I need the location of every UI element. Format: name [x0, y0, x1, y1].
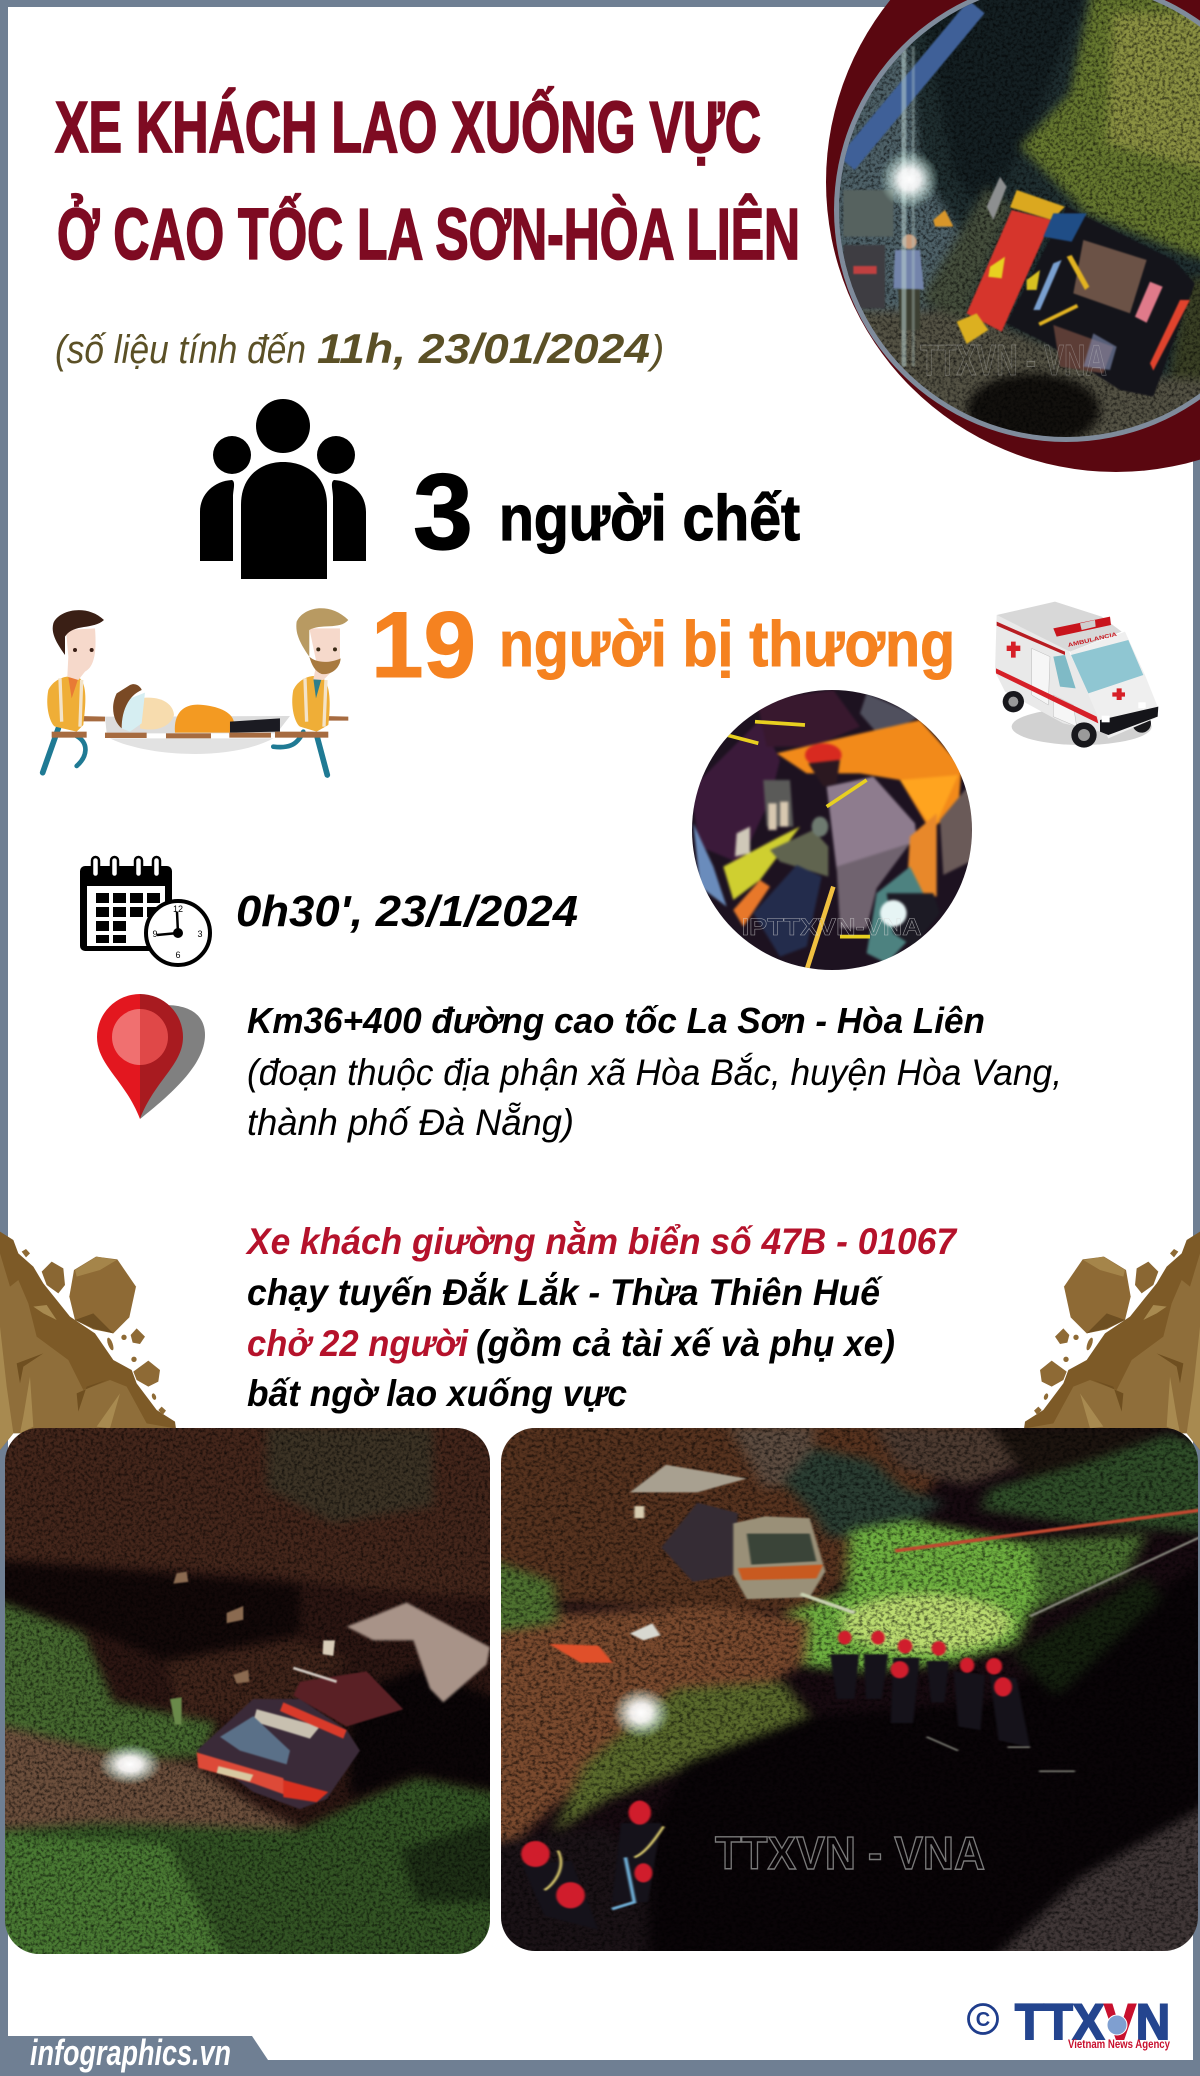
date and time of accident: 0h30', 23/1/2024 — [236, 887, 578, 936]
text: bus description: Xe khách giường nằm biển số 47B - 01067 — [245, 1220, 958, 1262]
stat: 3 deaths: người chết — [499, 482, 800, 554]
icon: falling rocks right — [1023, 1232, 1200, 1450]
text: bus description: (gồm cả tài xế và phụ xe) — [476, 1323, 895, 1364]
icon: calendar with clock: 3 — [197, 929, 203, 939]
title: Ở CAO TỐC LA SƠN-HÒA LIÊN — [57, 193, 800, 275]
photo: rescuers with injured person — [692, 690, 972, 970]
subtitle: data as of date: 11h, 23/01/2024 — [317, 325, 650, 372]
bus wreck — [661, 1503, 738, 1582]
photo: rescue team at ravine — [486, 1413, 1200, 1971]
crane — [847, 7, 977, 163]
text: accident location: thành phố Đà Nẵng) — [247, 1102, 574, 1143]
subtitle: data as of date: ) — [647, 328, 664, 372]
stat: 19 injured — [371, 592, 955, 697]
logo: TTXVN Vietnam News Agency: TTXVN — [1015, 1994, 1170, 2050]
text: accident location — [247, 1000, 1062, 1143]
icon: calendar with clock: 6 — [175, 950, 181, 960]
icon: map pin — [97, 994, 205, 1119]
text: bus description: chạy tuyến Đắk Lắk - Thừa Thiên Huế — [247, 1271, 883, 1313]
firefighters — [522, 1654, 1030, 1930]
stat: 19 injured: người bị thương — [499, 608, 955, 680]
icon: calendar with clock: 9 — [152, 929, 158, 939]
photo: rescue team at ravine: TTXVN - VNA — [715, 1827, 985, 1879]
subtitle: data as of date: (số liệu tính đến — [55, 328, 306, 372]
footer tab: infographics.vn: infographics.vn — [30, 2032, 231, 2073]
text: bus description: bất ngờ lao xuống vực — [247, 1373, 627, 1414]
photo: overturned bus in circular frame: TTXVN - VNA — [920, 336, 1107, 385]
icon: ambulance — [995, 602, 1158, 748]
subtitle: data as of date — [55, 325, 664, 372]
text: bus description — [245, 1220, 958, 1414]
icon: falling rocks left — [0, 1232, 177, 1450]
photo: wrecked bus in ravine — [0, 1413, 507, 1971]
text: accident location: (đoạn thuộc địa phận xã Hòa Bắc, huyện Hòa Vang, — [247, 1052, 1062, 1093]
title: XE KHÁCH LAO XUỐNG VỰC — [55, 86, 761, 168]
icon: ambulance: AMBULANCIA — [1067, 632, 1117, 649]
icon: calendar with clock: 12 — [173, 904, 183, 914]
text: accident location: Km36+400 đường cao tốc La Sơn - Hòa Liên — [247, 1000, 985, 1041]
photo: rescuers with injured person: IPTTXVN-VNA — [742, 914, 922, 941]
text: bus description: chở 22 người — [247, 1323, 469, 1364]
icon: group of people — [200, 399, 366, 579]
photo: overturned bus in circular frame — [803, 0, 1200, 483]
bus — [1007, 207, 1195, 397]
icon: rescuers carrying stretcher — [43, 608, 348, 775]
stat: 19 injured: 19 — [371, 592, 476, 697]
logo: TTXVN Vietnam News Agency: C — [976, 2009, 990, 2031]
logo: TTXVN Vietnam News Agency: Vietnam News Agency — [1068, 2039, 1171, 2051]
icon: calendar with clock — [80, 857, 210, 965]
title — [55, 86, 800, 275]
stat: 3 deaths: 3 — [413, 451, 473, 572]
stat: 3 deaths — [413, 451, 800, 572]
